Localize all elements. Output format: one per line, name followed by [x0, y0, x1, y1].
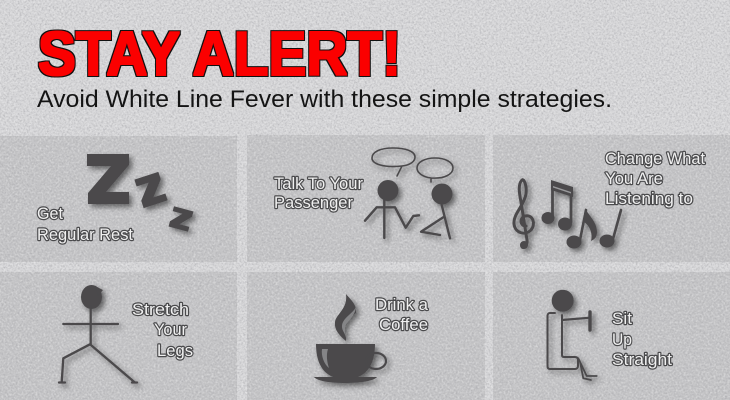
icon: seated figure at steering wheel [548, 290, 597, 380]
label: change what you are listening to: Listening to [605, 189, 693, 208]
icon: music notes and clef [514, 180, 621, 249]
label: drink a coffee: Coffee [379, 315, 428, 334]
label: stretch your legs: Your [154, 320, 187, 339]
label: get regular rest [37, 204, 133, 244]
label: sit up straight: Sit [612, 309, 632, 328]
label: talk to your passenger [274, 174, 363, 212]
label: drink a coffee: Drink a [375, 295, 429, 314]
label: change what you are listening to [605, 149, 705, 208]
panel: change what you are listening to [514, 149, 705, 249]
label: drink a coffee [375, 295, 429, 334]
label: get regular rest: Regular Rest [37, 225, 133, 244]
label: sit up straight [612, 309, 672, 369]
label: stretch your legs: Stretch [132, 300, 189, 319]
panel backgrounds [0, 135, 730, 400]
panel: get regular rest [37, 154, 193, 244]
label: get regular rest: Get [37, 204, 63, 223]
label: change what you are listening to: You Are [605, 169, 663, 188]
label: talk to your passenger: Passenger [274, 193, 353, 212]
icon: two talking stick figures [365, 148, 453, 238]
panel: talk to your passenger [274, 148, 453, 238]
panel: drink a coffee [314, 294, 429, 383]
label: change what you are listening to: Change What [605, 149, 705, 168]
label: talk to your passenger: Talk To Your [274, 174, 363, 193]
panel: sit up straight [548, 290, 672, 380]
label: stretch your legs [132, 300, 193, 360]
title: STAY ALERT! [38, 20, 401, 89]
icon: sleeping Z letters [87, 154, 193, 232]
icon: steaming coffee cup [314, 294, 386, 383]
label: stretch your legs: Legs [157, 341, 193, 360]
panel: stretch your legs [59, 285, 193, 382]
icon: stretching stick figure [59, 285, 137, 382]
label: sit up straight: Up [612, 330, 632, 349]
subtitle: Avoid White Line Fever with these simple strategies. [37, 86, 612, 113]
label: sit up straight: Straight [612, 350, 672, 369]
